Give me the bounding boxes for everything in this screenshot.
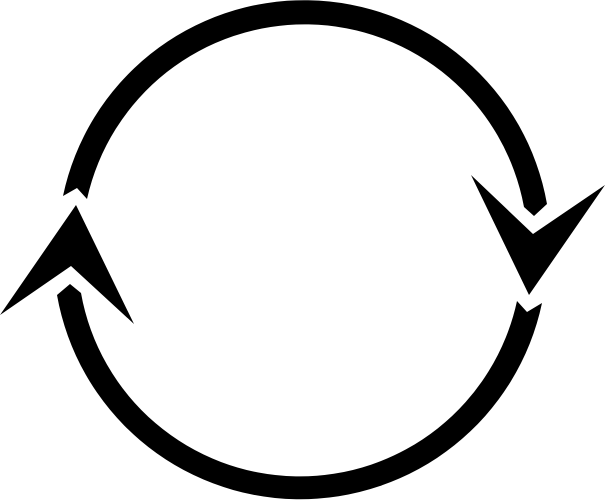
left arrowhead pointing up — [0, 205, 134, 324]
right arrowhead pointing down — [471, 175, 605, 295]
upper arc stroke — [63, 0, 547, 216]
lower arc stroke — [57, 284, 542, 499]
